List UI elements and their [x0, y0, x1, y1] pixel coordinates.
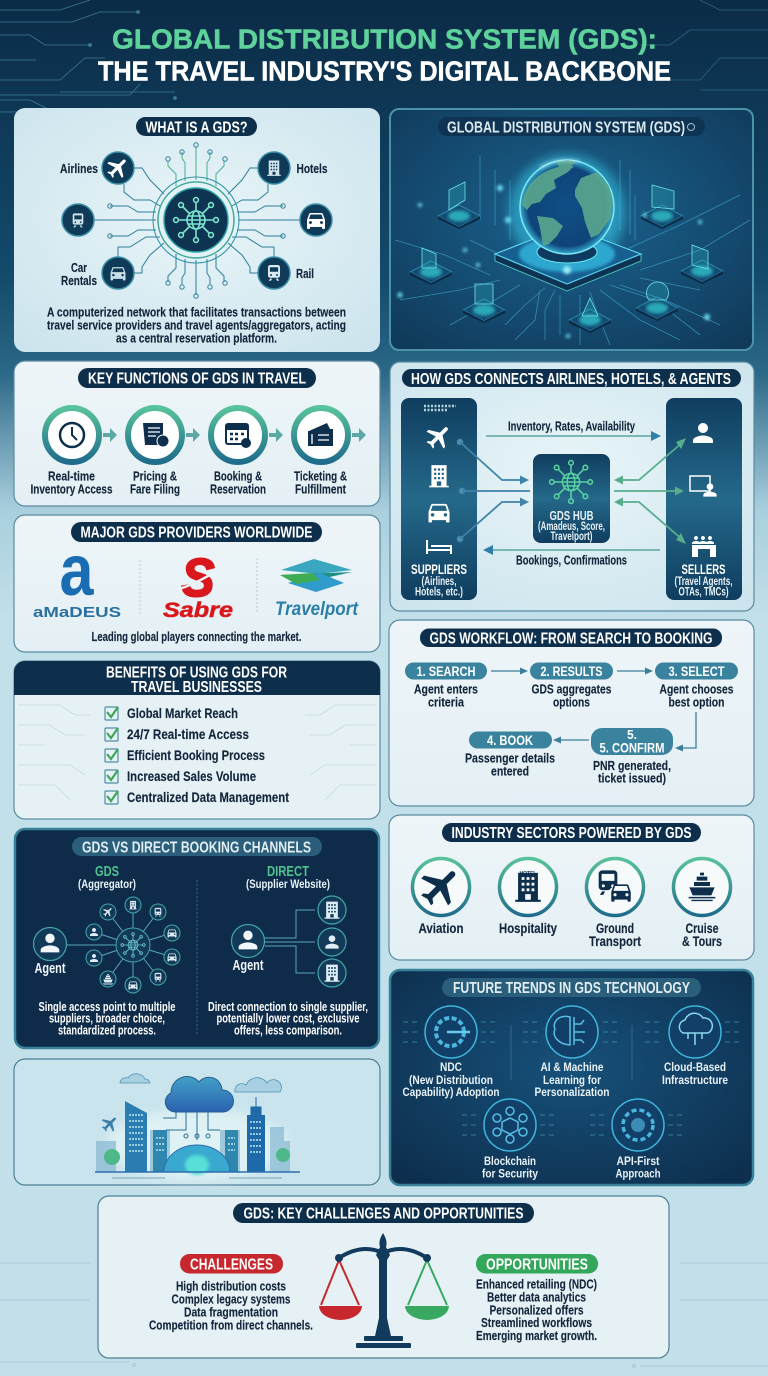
network — [67, 905, 172, 985]
step 2: options — [553, 694, 590, 710]
step 1: 1. SEARCH — [416, 664, 476, 679]
circuit pattern: bottom — [0, 1263, 768, 1368]
node: transfer — [62, 204, 94, 236]
scale — [319, 1233, 449, 1348]
checklist: Global Market Reach — [127, 706, 238, 721]
node: hotels: Hotels — [296, 161, 328, 176]
arrows — [491, 668, 696, 752]
panel: what is a GDS — [14, 108, 380, 352]
circuit pattern: top right — [640, 0, 768, 90]
heading: GDS: KEY CHALLENGES AND OPPORTUNITIES — [244, 1206, 524, 1222]
node: rail — [258, 257, 314, 289]
panel: industry sectors — [389, 815, 754, 960]
checklist: Efficient Booking Process — [127, 748, 265, 763]
trend: AI: Personalization — [534, 1087, 610, 1099]
step 1: criteria — [428, 694, 465, 710]
arrow: bookings — [483, 545, 660, 568]
trend: AI — [534, 1006, 610, 1099]
trend: NDC — [402, 1006, 500, 1099]
logo: sabre — [163, 548, 233, 622]
trend: blockchain: Blockchain — [484, 1156, 536, 1168]
column: sellers: (Travel Agents, — [674, 576, 732, 588]
panel: key functions — [14, 361, 380, 506]
trend: cloud — [662, 1006, 728, 1087]
arrow: inventory: Inventory, Rates, Availability — [508, 418, 636, 434]
node: car — [300, 204, 332, 236]
challenges — [149, 1254, 313, 1332]
panel: challenges and opportunities — [98, 1196, 669, 1358]
description: A computerized network that facilitates transactions between — [47, 304, 346, 320]
device platform — [495, 226, 641, 291]
trend: NDC: Capability) Adoption — [402, 1087, 500, 1099]
column: GDS: Single access point to multiple — [38, 999, 176, 1014]
column: suppliers: (Airlines, — [422, 576, 456, 588]
heading: WHAT IS A GDS? — [146, 120, 248, 136]
title — [98, 24, 671, 86]
hub: GDS HUB — [550, 508, 594, 523]
column: direct: potentially lower cost, exclusive — [216, 1010, 360, 1026]
trend: NDC: (New Distribution — [409, 1075, 493, 1087]
logo: amadeus: aMaDEUS — [33, 604, 121, 621]
logo: travelport — [275, 559, 359, 620]
satellite platforms — [410, 182, 723, 333]
step: ticketing: Ticketing & — [294, 468, 347, 484]
panel: workflow — [389, 620, 754, 806]
title line 1: GLOBAL DISTRIBUTION SYSTEM (GDS): — [112, 24, 657, 54]
circuit lines — [395, 155, 750, 345]
heading — [233, 1203, 534, 1223]
column: GDS — [34, 864, 180, 1038]
step 5 — [591, 727, 673, 786]
panel: cloud city illustration — [14, 1059, 380, 1185]
back skyline — [96, 1127, 290, 1172]
node: car rentals — [61, 257, 134, 289]
step: pricing: Pricing & — [133, 468, 177, 484]
column: GDS: (Aggregator) — [78, 879, 136, 891]
heading — [14, 661, 380, 696]
circuit pattern: top left — [0, 0, 176, 128]
arrow: bookings: Bookings, Confirmations — [516, 552, 627, 568]
node: rail: Rail — [296, 266, 314, 281]
dome — [164, 1145, 230, 1172]
opportunities: Personalized offers — [490, 1302, 584, 1318]
step 3 — [655, 662, 738, 710]
sector: ground transport: Ground — [596, 921, 634, 936]
heading: GDS VS DIRECT BOOKING CHANNELS — [82, 840, 311, 856]
challenges: Complex legacy systems — [172, 1292, 290, 1306]
step 4 — [465, 732, 555, 778]
sector: hospitality — [499, 858, 557, 936]
step 2: GDS aggregates — [532, 682, 612, 696]
sector: hospitality: HOTEL — [520, 871, 536, 877]
sector: hospitality: Hospitality — [499, 921, 557, 936]
step: booking: Reservation — [210, 482, 266, 496]
heading: TRAVEL BUSINESSES — [131, 679, 262, 696]
column: suppliers: Hotels, etc.) — [415, 586, 463, 598]
step 4: Passenger details — [465, 750, 555, 766]
heading — [71, 522, 322, 542]
agent: Agent — [34, 961, 66, 977]
checklist: Centralized Data Management — [127, 790, 289, 805]
ground — [95, 1171, 300, 1173]
caption: Leading global players connecting the market. — [92, 629, 302, 644]
trend: AI: AI & Machine — [540, 1062, 604, 1074]
sector: ground transport — [586, 858, 644, 949]
logo: sabre: S — [182, 548, 214, 608]
checklist: 24/7 Real-time Access — [127, 727, 249, 742]
trend: cloud: Cloud-Based — [664, 1062, 726, 1074]
column: suppliers — [401, 398, 477, 600]
column: direct — [208, 864, 368, 1038]
connectors: hub to sellers — [614, 438, 686, 544]
sector: cruise: Cruise — [686, 921, 719, 936]
step 5: ticket issued) — [598, 770, 666, 786]
step: ticketing — [294, 408, 366, 496]
column: direct: offers, less comparison. — [234, 1022, 342, 1038]
sector: aviation: Aviation — [418, 921, 464, 936]
column: sellers: OTAs, TMCs) — [678, 586, 729, 598]
opportunities: Enhanced retailing (NDC) — [476, 1276, 597, 1292]
logo: amadeus — [33, 531, 121, 621]
panel: global distribution system illustration — [390, 109, 753, 350]
challenges: Data fragmentation — [184, 1304, 278, 1320]
column: GDS: GDS — [95, 864, 119, 880]
step 4: entered — [491, 764, 529, 778]
step: booking — [210, 408, 283, 496]
step 3: 3. SELECT — [668, 664, 725, 679]
step 5: 5. — [627, 727, 637, 742]
panel: GDS vs direct — [15, 829, 379, 1048]
glow — [509, 154, 625, 270]
sector: aviation — [412, 858, 470, 936]
hub circuit — [94, 143, 300, 298]
title line 2: THE TRAVEL INDUSTRY'S DIGITAL BACKBONE — [98, 56, 671, 86]
faint circuit pattern — [18, 705, 376, 800]
trend: API: API-First — [616, 1156, 660, 1168]
heading: FUTURE TRENDS IN GDS TECHNOLOGY — [453, 980, 691, 997]
step 2 — [530, 662, 613, 710]
step: real-time inventory: Inventory Access — [30, 482, 112, 496]
column: sellers — [666, 398, 742, 600]
step: real-time inventory: Real-time — [48, 468, 95, 484]
glow — [107, 1110, 287, 1180]
step 5: 5. CONFIRM — [600, 740, 664, 756]
step 5: PNR generated, — [593, 758, 671, 773]
logo: amadeus: a — [60, 531, 94, 611]
buildings — [125, 1097, 265, 1172]
agent — [232, 924, 264, 974]
step: real-time inventory — [30, 408, 117, 496]
trend: AI: Learning for — [543, 1075, 601, 1087]
node: car rentals: Rentals — [61, 273, 97, 288]
step: ticketing: Fulfillment — [295, 482, 347, 496]
heading: KEY FUNCTIONS OF GDS IN TRAVEL — [88, 370, 306, 388]
challenges: CHALLENGES — [190, 1256, 273, 1274]
challenges: Competition from direct channels. — [149, 1318, 313, 1332]
node: car rentals: Car — [71, 260, 87, 275]
connectors: suppliers to hub — [458, 440, 530, 542]
step 3: Agent chooses — [660, 682, 734, 696]
hub: (Amadeus, Score, — [538, 521, 605, 533]
opportunities: Streamlined workflows — [481, 1315, 592, 1330]
sector: ground transport: Transport — [589, 934, 641, 949]
description: travel service providers and travel agents/aggregators, acting — [47, 318, 346, 332]
opportunities: OPPORTUNITIES — [486, 1256, 588, 1274]
description — [47, 304, 346, 346]
heading: GLOBAL DISTRIBUTION SYSTEM (GDS) — [447, 120, 685, 136]
hub — [533, 454, 610, 543]
sector: cruise: & Tours — [682, 934, 722, 949]
opportunities — [476, 1254, 598, 1343]
opportunities: Emerging market growth. — [476, 1328, 597, 1343]
logo: travelport: Travelport — [275, 599, 359, 620]
panel: future trends — [390, 970, 753, 1185]
plane — [98, 1112, 121, 1135]
step: pricing — [128, 408, 200, 496]
column: suppliers: SUPPLIERS — [411, 562, 467, 577]
node: hotels — [258, 152, 328, 184]
opportunities: Better data analytics — [487, 1290, 586, 1304]
checklist: Increased Sales Volume — [127, 769, 256, 784]
agent — [34, 928, 66, 977]
node: airlines: Airlines — [60, 161, 98, 176]
tech dashes — [403, 1022, 743, 1135]
heading: INDUSTRY SECTORS POWERED BY GDS — [452, 825, 692, 842]
trend: NDC: NDC — [440, 1062, 462, 1074]
step 3: best option — [668, 694, 725, 710]
column: GDS: suppliers, broader choice, — [49, 1010, 165, 1026]
arrow: inventory — [486, 418, 661, 441]
node: airlines — [60, 152, 134, 184]
sparkle dots — [398, 185, 710, 338]
panel: benefits — [14, 661, 380, 819]
dividers — [140, 558, 257, 616]
trend: API — [612, 1099, 664, 1180]
checklist — [105, 706, 289, 805]
divider — [196, 880, 198, 1035]
hub — [153, 177, 239, 263]
logo: sabre: Sabre — [163, 599, 233, 622]
trend: blockchain — [482, 1099, 539, 1180]
heading — [78, 368, 316, 388]
step 2: 2. RESULTS — [540, 664, 602, 679]
hub: Travelport) — [550, 531, 593, 543]
column: direct: Direct connection to single supplier, — [208, 999, 368, 1014]
column: direct: (Supplier Website) — [246, 879, 330, 891]
small clouds — [120, 1074, 281, 1092]
column: GDS: standardized process. — [58, 1022, 156, 1038]
trend: blockchain: for Security — [482, 1168, 539, 1180]
step: booking: Booking & — [214, 468, 262, 484]
trend: cloud: Infrastructure — [662, 1075, 728, 1087]
panel: major providers — [14, 515, 380, 652]
step 1: Agent enters — [414, 682, 478, 696]
step: pricing: Fare Filing — [130, 482, 180, 496]
panel: how GDS connects — [390, 362, 754, 611]
description: as a central reservation platform. — [116, 330, 277, 346]
heading: BENEFITS OF USING GDS FOR — [106, 664, 287, 682]
step 4: 4. BOOK — [487, 733, 533, 748]
step 1 — [405, 662, 487, 710]
trend: API: Approach — [616, 1168, 660, 1180]
heading: MAJOR GDS PROVIDERS WORLDWIDE — [80, 524, 313, 542]
challenges: High distribution costs — [176, 1278, 286, 1294]
column: direct: DIRECT — [267, 864, 309, 880]
column: sellers: SELLERS — [682, 562, 726, 577]
cloud — [163, 1077, 233, 1140]
globe — [520, 160, 614, 254]
trees — [104, 1148, 290, 1165]
agent: Agent — [232, 958, 264, 974]
sector: cruise — [674, 858, 730, 949]
